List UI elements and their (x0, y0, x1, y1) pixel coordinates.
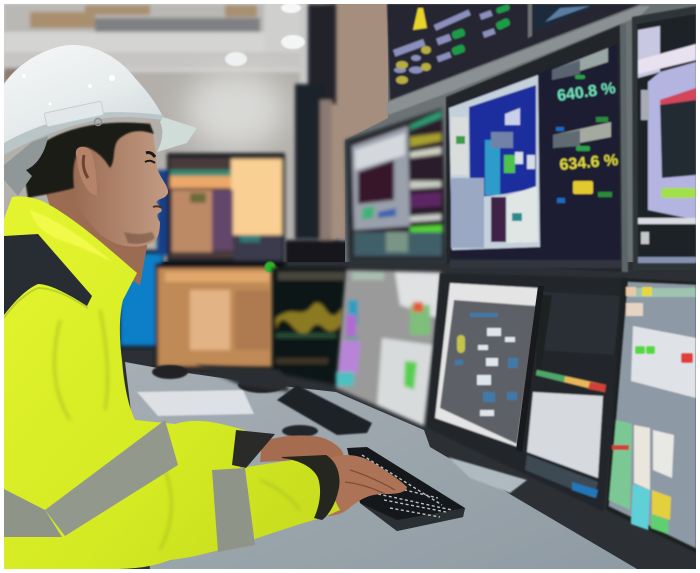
dark backing behind lower monitors (118, 262, 700, 572)
yellow warning cone (413, 8, 427, 30)
dark shoulder panel (4, 234, 92, 315)
beard stubble (124, 232, 155, 244)
hard hat (4, 45, 197, 155)
wall spotlight glow (185, 70, 285, 150)
colour gradient bar (536, 370, 606, 392)
top monitor (387, 4, 640, 100)
monitor: orange lower (155, 263, 278, 369)
middle monitor left (345, 108, 448, 265)
ear (76, 147, 97, 195)
eye (145, 161, 155, 163)
middle monitor right (632, 6, 696, 270)
desk items (137, 365, 372, 437)
lower monitor: dark yellow graph (272, 268, 348, 385)
back hand (260, 435, 343, 462)
reflective stripes (4, 420, 255, 552)
hair (24, 122, 154, 198)
backing behind upper monitors (345, 4, 700, 280)
front hand (326, 455, 407, 516)
monitor: orange upper (167, 153, 285, 263)
lower monitor: grey panels (336, 270, 441, 426)
readout upper (552, 47, 610, 72)
top monitor rail (386, 6, 650, 115)
face (72, 122, 168, 246)
neck (46, 189, 148, 285)
paper (137, 390, 254, 416)
back keyboard (277, 385, 372, 435)
far monitors (118, 153, 285, 369)
green status light (264, 262, 276, 272)
operator (4, 45, 407, 569)
back mouse and items (237, 382, 282, 394)
background: ceiling and wall (4, 4, 388, 262)
jacket body (4, 196, 340, 569)
lower monitor: process diagram (427, 273, 626, 512)
helmet strap (4, 136, 48, 196)
back mouse near hand (282, 425, 318, 437)
keyboard (347, 447, 465, 531)
middle monitor centre (446, 24, 628, 272)
desk (125, 362, 637, 569)
monitor divider (516, 286, 544, 452)
middle monitor centre: 634.6 % (559, 152, 619, 174)
monitor: blue small (118, 250, 164, 348)
lower monitor: right status board (606, 278, 696, 553)
ceiling lights (225, 3, 305, 66)
readout lower (554, 121, 612, 144)
cuffs (232, 430, 340, 520)
jacket fold shadows (54, 310, 300, 550)
dark pillar (285, 4, 350, 270)
middle monitor centre: 640.8 % (556, 80, 617, 105)
light block beyond the desk edge (448, 457, 527, 493)
